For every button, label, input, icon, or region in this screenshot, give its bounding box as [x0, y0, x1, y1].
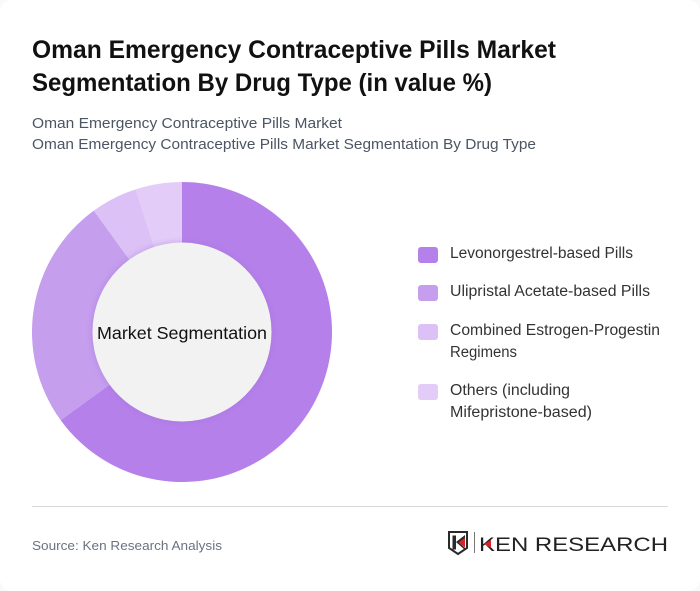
- source note: Source: Ken Research Analysis: [32, 538, 223, 553]
- title: Segmentation By Drug Type (in value %): [32, 69, 492, 97]
- logo: Ken Research: [449, 532, 668, 556]
- legend: [418, 245, 660, 421]
- legend item: Combined Estrogen-Progestin Regimens: Combined Estrogen-Progestin: [450, 322, 660, 339]
- legend item: Others: Mifepristone-based): [450, 404, 592, 421]
- legend item: Ulipristal Acetate-based Pills: Ulipristal Acetate-based Pills: [450, 283, 650, 300]
- subtitle: [32, 115, 536, 153]
- icon: shield: [449, 532, 467, 554]
- legend item: Combined Estrogen-Progestin Regimens: [418, 322, 660, 361]
- donut chart: [32, 182, 332, 482]
- segment: Levonorgestrel-based Pills: [61, 182, 332, 482]
- title: [32, 36, 557, 97]
- wordmark: KEN RESEARCH: [479, 534, 668, 556]
- legend item: Others: [418, 382, 592, 421]
- subtitle: Oman Emergency Contraceptive Pills Market: [32, 115, 343, 132]
- legend item: Combined Estrogen-Progestin Regimens: Regimens: [450, 344, 517, 361]
- title: Oman Emergency Contraceptive Pills Market: [32, 36, 557, 64]
- segment: Ulipristal Acetate-based Pills: [32, 211, 182, 420]
- legend item: Levonorgestrel-based Pills: Levonorgestrel-based Pills: [450, 245, 633, 262]
- legend item: Others: Others (including: [450, 382, 570, 399]
- segment: Others: [136, 182, 182, 332]
- donut hole shadow: [91, 241, 273, 423]
- segment: Combined Estrogen-Progestin Regimens: [94, 189, 182, 332]
- donut hole: [92, 242, 272, 422]
- subtitle: Oman Emergency Contraceptive Pills Market Segmentation By Drug Type: [32, 136, 536, 153]
- center label: Market Segmentation: [97, 323, 267, 343]
